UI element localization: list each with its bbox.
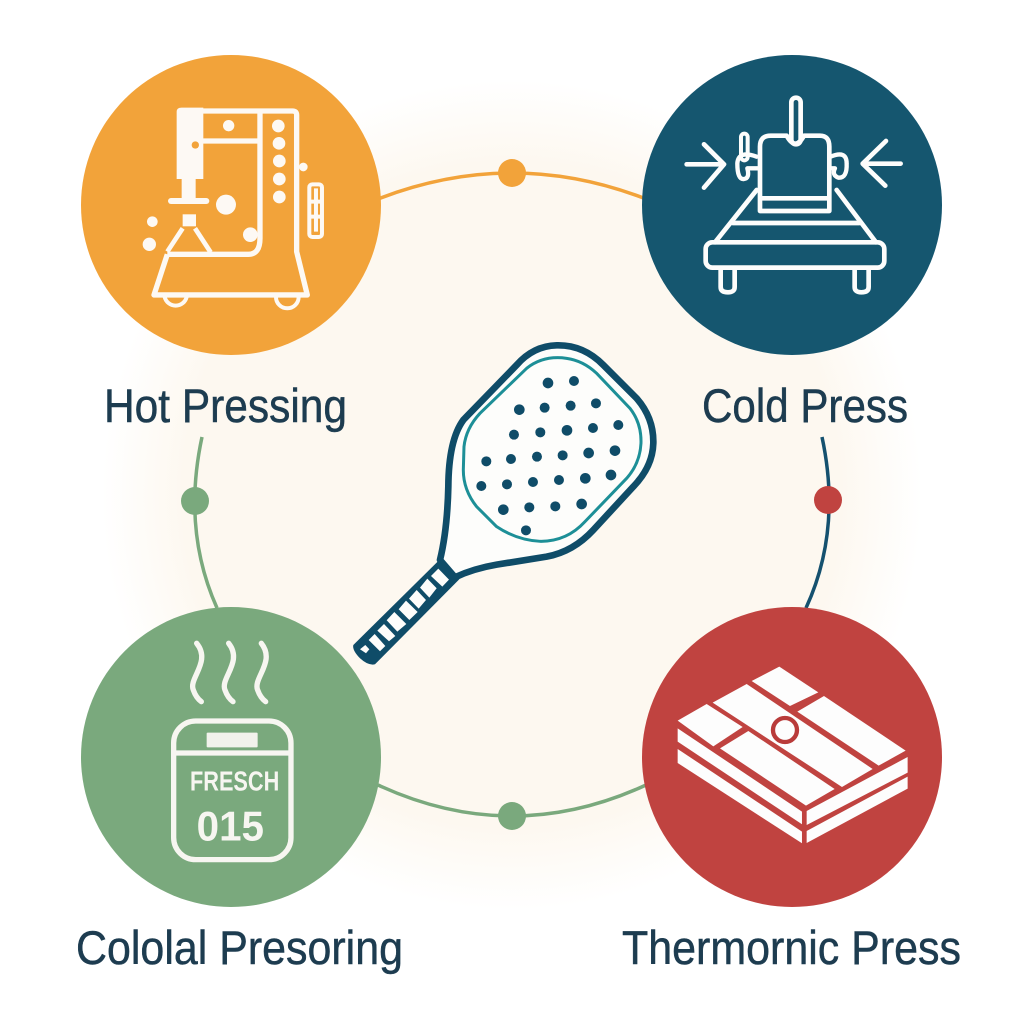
node: left green bbox=[181, 487, 209, 515]
green circle bbox=[81, 607, 381, 907]
node: top orange bbox=[498, 159, 526, 187]
icon: hot press machine bbox=[143, 108, 322, 308]
icon: cold press machine bbox=[687, 98, 901, 292]
teal inner rim bbox=[463, 358, 641, 541]
panel: colonial presoring bbox=[81, 607, 381, 907]
orange circle bbox=[81, 55, 381, 355]
label: thermornic press: Thermornic Press bbox=[622, 921, 961, 974]
panel: hot pressing bbox=[81, 55, 381, 355]
icon: steaming label container bbox=[174, 643, 291, 860]
panel: thermornic press bbox=[642, 607, 942, 907]
central cream background bbox=[102, 80, 922, 910]
node: bottom green bbox=[498, 802, 526, 830]
paddle face bbox=[440, 345, 653, 577]
handle bbox=[353, 561, 459, 665]
connecting ring bbox=[195, 173, 829, 816]
panel: cold press bbox=[642, 55, 942, 355]
label: colonial presoring: Cololal Presoring bbox=[76, 921, 403, 974]
label: cold press: Cold Press bbox=[702, 379, 908, 432]
icon: layered board bbox=[678, 667, 908, 843]
label: hot pressing: Hot Pressing bbox=[104, 379, 347, 432]
red circle bbox=[642, 607, 942, 907]
center ring bbox=[773, 718, 797, 742]
paddle holes bbox=[476, 376, 623, 535]
central paddle illustration bbox=[353, 345, 653, 665]
blue circle bbox=[642, 55, 942, 355]
node: right red bbox=[814, 486, 842, 514]
icon: steaming label container: 015 bbox=[197, 803, 264, 850]
icon: steaming label container: FRESCH bbox=[190, 765, 279, 796]
